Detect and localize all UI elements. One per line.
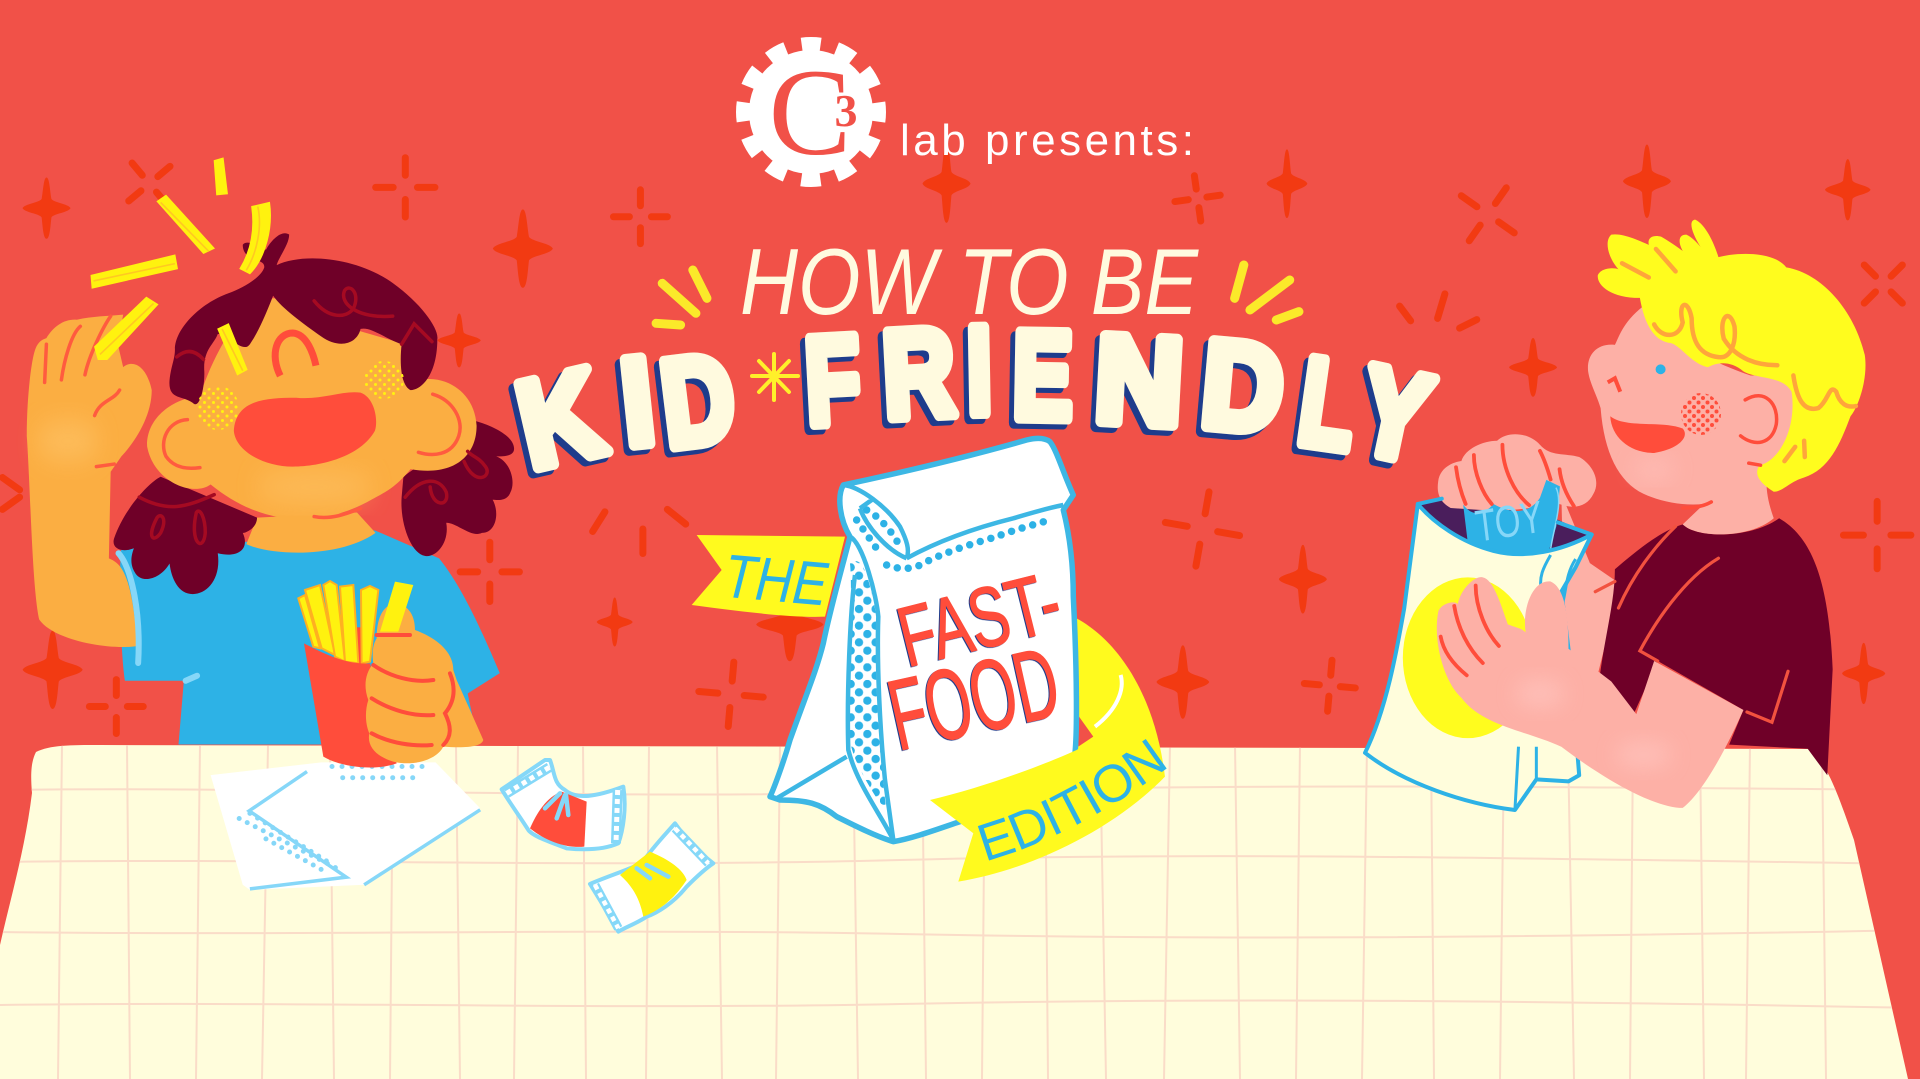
ear, chin and hand lines bbox=[45, 316, 460, 518]
bag halftone side bbox=[848, 561, 887, 813]
head and ears bbox=[147, 298, 477, 519]
title: kid friendly: I bbox=[966, 300, 993, 440]
heading: lab presents: lab presents: bbox=[900, 116, 1194, 165]
bag yellow circle bbox=[1403, 577, 1533, 738]
hair curls bbox=[1622, 249, 1856, 461]
yellow sneaker bbox=[590, 823, 713, 932]
toy bag interior bbox=[1420, 498, 1592, 559]
hair bbox=[1598, 220, 1865, 492]
logo: C3 gear: 3 bbox=[834, 85, 858, 136]
toy bbox=[1463, 480, 1560, 561]
boy character bbox=[1365, 220, 1865, 810]
bag fold dots bbox=[857, 510, 1052, 568]
lower hand and forearm bbox=[1437, 577, 1743, 808]
title accent ticks bbox=[656, 265, 1299, 325]
title: how to be: HOW TO BE bbox=[740, 229, 1199, 334]
finger lines bbox=[1456, 445, 1574, 506]
title: kid friendly: R bbox=[879, 302, 958, 444]
title: kid friendly: K bbox=[505, 341, 615, 495]
table with checked cloth bbox=[0, 745, 1920, 1079]
red sneaker bbox=[502, 760, 625, 849]
hair curls bbox=[139, 288, 487, 544]
title: kid friendly: E bbox=[1012, 305, 1074, 445]
eye bbox=[1656, 364, 1666, 374]
title: kid friendly: F bbox=[802, 309, 864, 451]
bag lettering: FAST-FOOD: FAST- bbox=[889, 554, 1070, 686]
paper bag with banners bbox=[692, 436, 1167, 882]
t-shirt bbox=[1597, 518, 1833, 775]
title: kid friendly: D bbox=[654, 327, 742, 474]
mouth bbox=[1610, 416, 1685, 453]
title: kid friendly: N bbox=[1092, 310, 1187, 453]
mouth bbox=[234, 392, 376, 467]
hair: back right bbox=[401, 421, 514, 556]
back arm bbox=[1561, 494, 1617, 678]
toy: TOY bbox=[1473, 492, 1545, 552]
bag lettering: FAST-FOOD bbox=[879, 554, 1070, 772]
fries in cup bbox=[298, 581, 378, 663]
title: kid friendly: L bbox=[1291, 331, 1365, 476]
flying fries bbox=[91, 158, 270, 375]
bag fold lines bbox=[777, 485, 1063, 840]
banner: THE: THE bbox=[721, 542, 831, 620]
neck bbox=[246, 512, 376, 553]
logo: C3 gear: C bbox=[769, 44, 851, 181]
wrapper toys: sneakers bbox=[502, 760, 713, 932]
background sparkles bbox=[2, 144, 1920, 733]
raised arm and hand bbox=[27, 315, 152, 647]
logo: C3 gear bbox=[744, 44, 878, 181]
title asterisk bbox=[752, 354, 798, 400]
bag inner fold lines bbox=[1515, 555, 1576, 810]
title: kid friendly: Y bbox=[1347, 340, 1442, 490]
toy bag front bbox=[1365, 504, 1592, 810]
sleeve trim bbox=[119, 553, 197, 681]
title: kid friendly: I bbox=[615, 331, 660, 472]
banner swoosh behind bag bbox=[1073, 618, 1165, 777]
napkins on table bbox=[211, 762, 480, 890]
nose bbox=[1608, 378, 1620, 392]
t-shirt bbox=[120, 530, 500, 745]
title: kid friendly bbox=[505, 300, 1442, 495]
yellow freckles on cheeks bbox=[197, 361, 404, 430]
cup front bbox=[304, 643, 397, 768]
eye bbox=[275, 333, 316, 376]
banner: EDITION: EDITION bbox=[978, 739, 1167, 860]
bag body bbox=[770, 438, 1076, 842]
ear and chin lines bbox=[1683, 396, 1777, 508]
title: kid friendly: D bbox=[1197, 313, 1289, 459]
shirt lines bbox=[1595, 526, 1788, 722]
girl character bbox=[27, 158, 514, 890]
fries cup and hand bbox=[298, 581, 483, 768]
cup back bbox=[355, 627, 365, 667]
upper hand bbox=[1438, 434, 1596, 510]
hair: top bbox=[169, 233, 437, 404]
bag lettering: FAST-FOOD: FOOD bbox=[879, 626, 1069, 772]
boy cheek freckles bbox=[1681, 393, 1721, 435]
head and neck bbox=[1588, 306, 1795, 534]
holding hand bbox=[366, 603, 483, 763]
hair: back left bbox=[114, 477, 257, 594]
